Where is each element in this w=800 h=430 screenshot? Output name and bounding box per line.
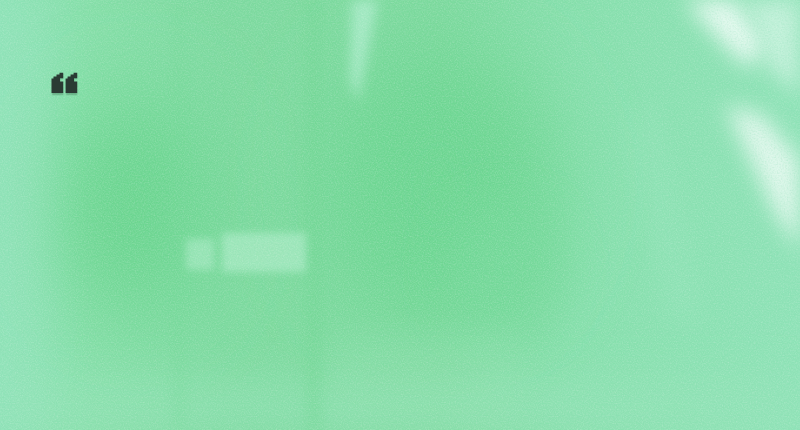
left quote mark [52, 73, 63, 93]
vertical light band lower [330, 330, 520, 430]
darker green glow left [60, 95, 210, 315]
darker green glow centre [325, 50, 555, 320]
window reflection right pane [222, 233, 306, 272]
bright light streak right [725, 105, 800, 250]
quote mark shadow [52, 74, 77, 95]
darker green glow lower centre [450, 205, 560, 335]
vertical dark band left [172, 0, 186, 430]
right quote mark [66, 73, 77, 93]
light edge at bottom [0, 385, 800, 430]
soft light wash top right [745, 0, 800, 95]
window reflection left pane [186, 239, 214, 270]
vertical dark band centre [306, 0, 322, 430]
icon: quotation mark [52, 73, 77, 95]
vertical light streak [350, 0, 378, 102]
bright light streak top right [685, 0, 768, 68]
faint diagonal glow right [630, 110, 700, 320]
light edge at left [0, 0, 35, 430]
